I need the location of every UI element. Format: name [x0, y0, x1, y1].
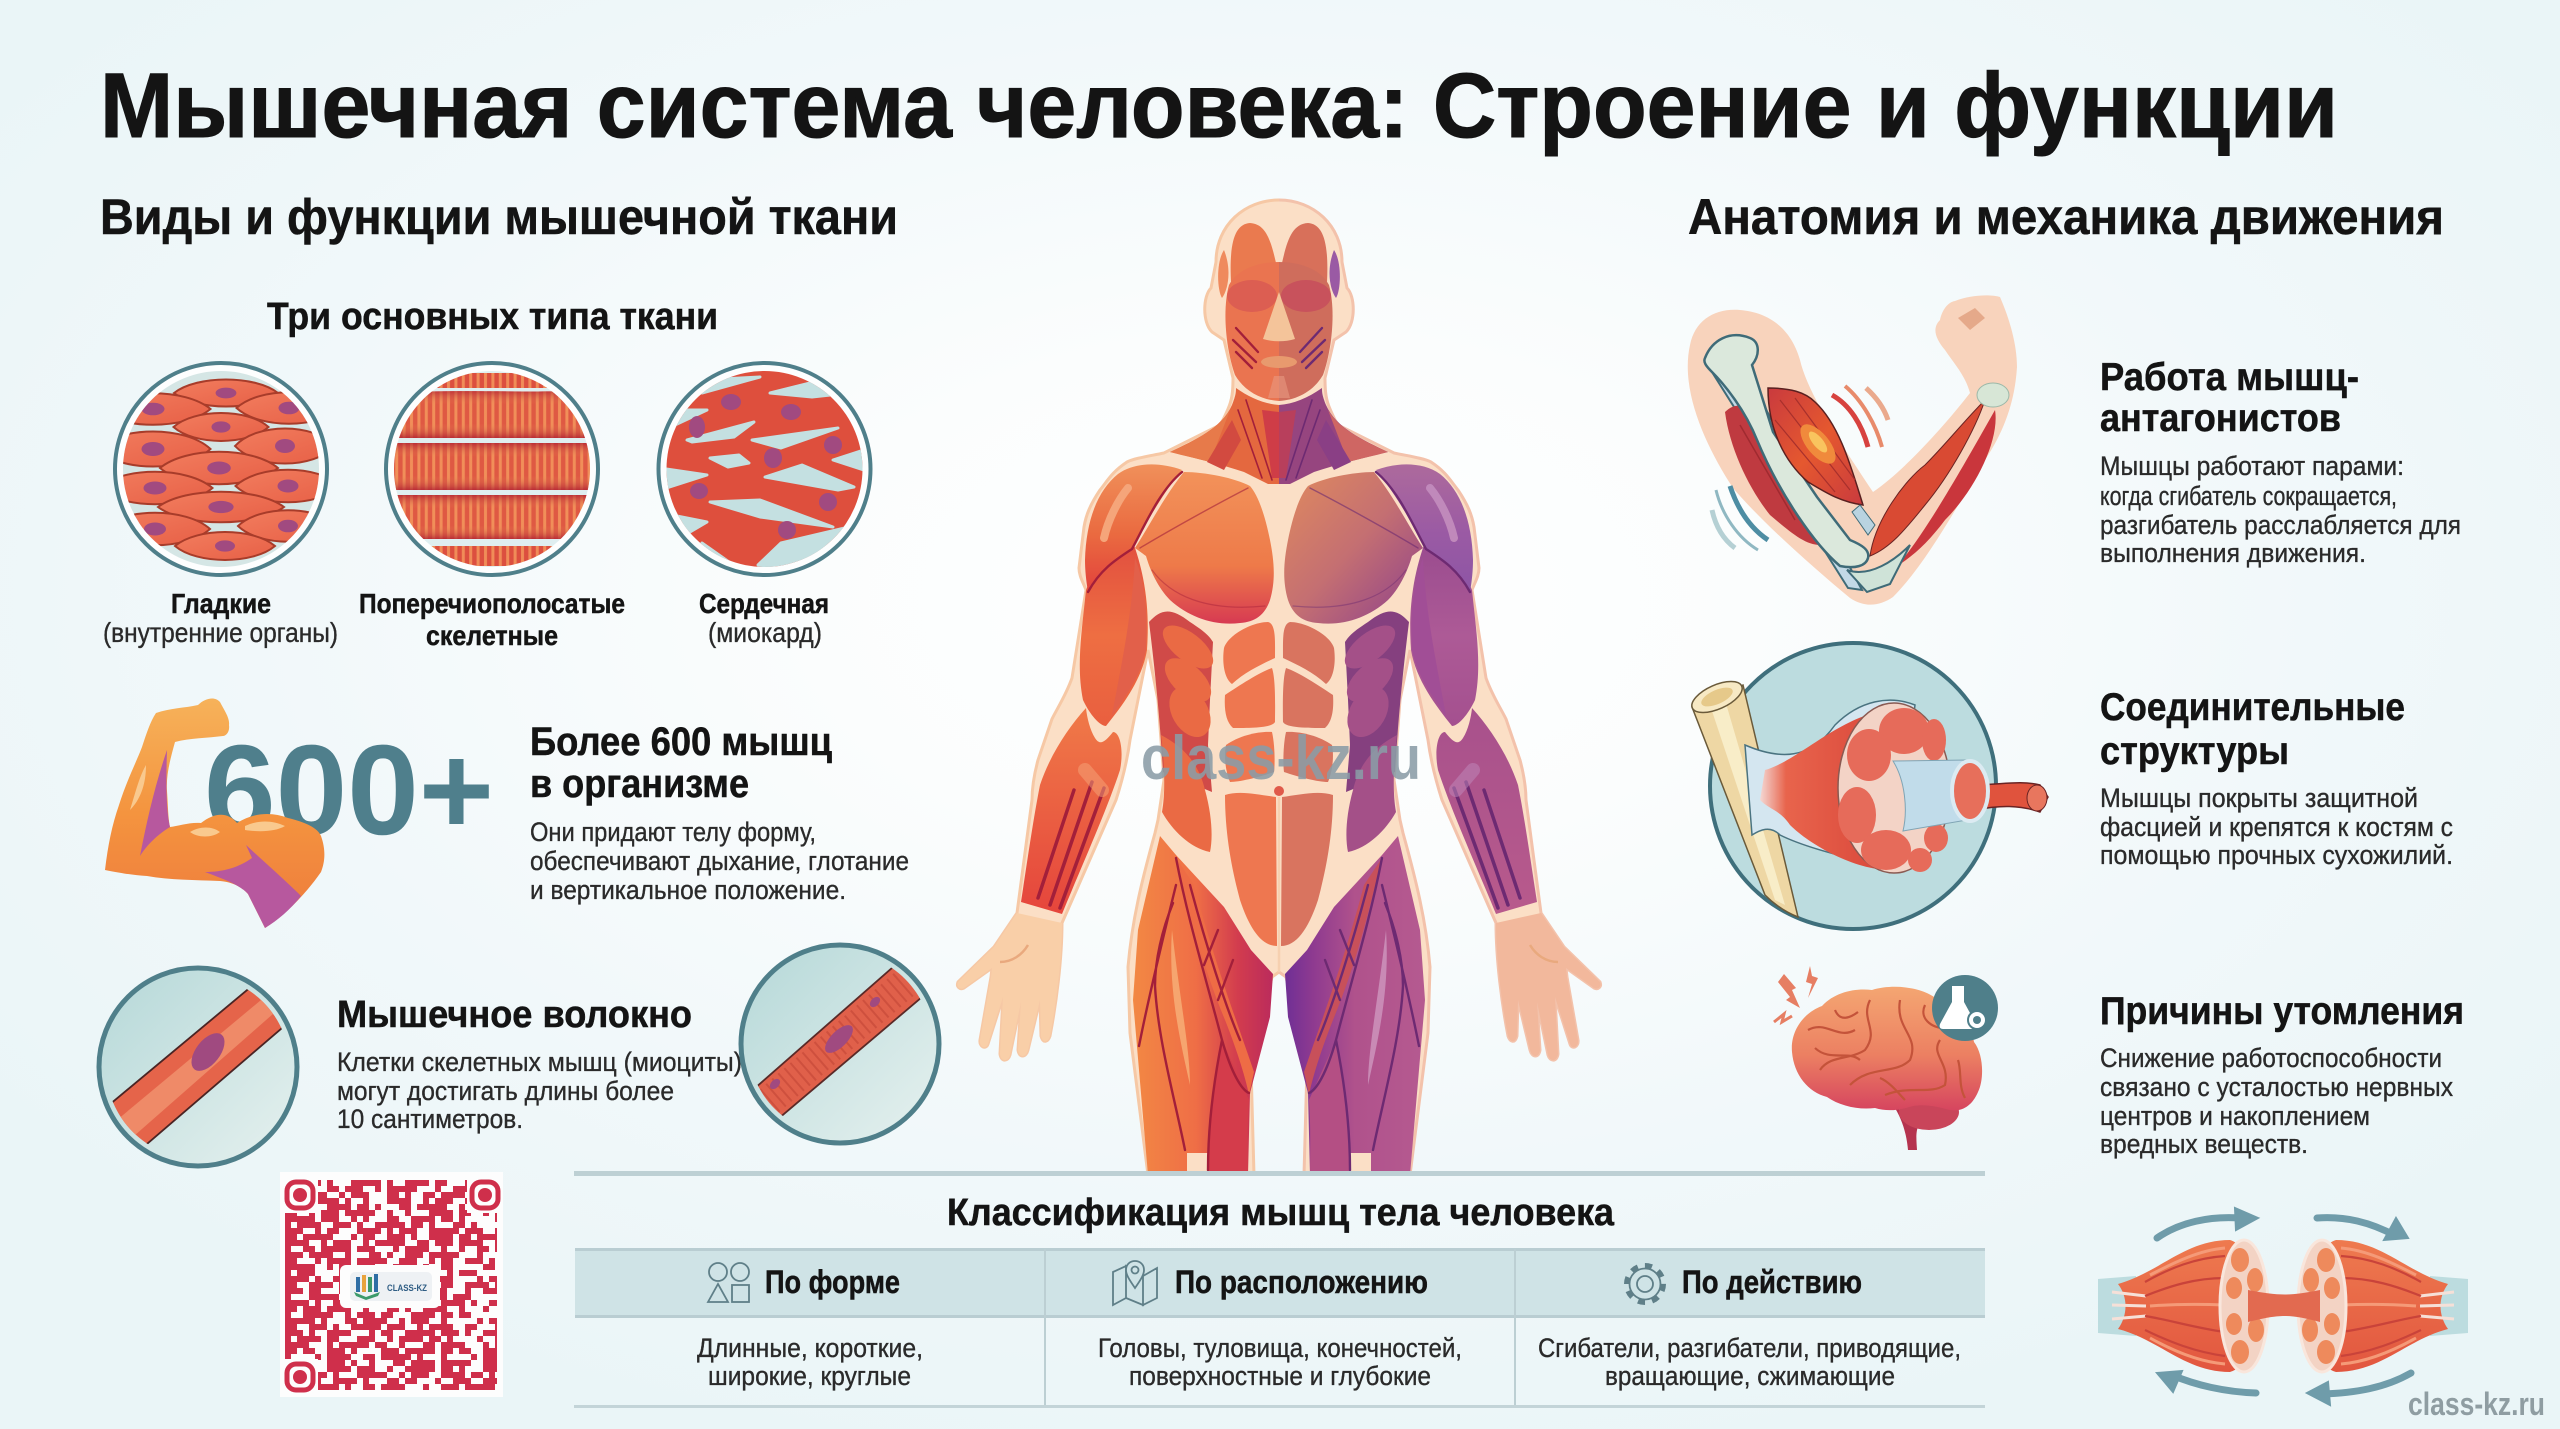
heading: connective structures: структуры — [2100, 730, 2289, 773]
QR code: CLASS-KZ — [387, 1283, 427, 1294]
big number: 600+ — [204, 719, 494, 862]
heading: more than 600: Более 600 мышц — [530, 720, 832, 764]
label: striated — [359, 588, 625, 651]
text: connective description: фасцией и крепятся к костям с — [2100, 812, 2453, 842]
label: cardiac — [699, 588, 829, 648]
figure: right half (purple muscles) — [1279, 200, 1601, 1175]
label: cardiac: (миокард) — [708, 617, 822, 648]
text: fiber description: Клетки скелетных мышц (миоциты) — [337, 1047, 742, 1077]
icon: shapes — [708, 1263, 749, 1302]
heading: more than 600: в организме — [530, 762, 749, 806]
text: muscles description — [530, 817, 909, 905]
heading: antagonists: Работа мышц- — [2100, 356, 2359, 399]
heading: causes of fatigue: Причины утомления — [2100, 990, 2464, 1033]
panel: connective structures — [1687, 643, 2453, 929]
panel: antagonist muscles — [1688, 295, 2461, 605]
icon: gear — [1627, 1266, 1663, 1302]
header: by location: По расположению — [1175, 1264, 1428, 1300]
panel: classification table — [574, 1171, 1985, 1408]
column: by location — [1098, 1261, 1462, 1391]
heading: right column: Анатомия и механика движения — [1688, 189, 2444, 245]
cell: by location: поверхностные и глубокие — [1129, 1361, 1431, 1391]
text: antagonists description: разгибатель расслабляется для — [2100, 510, 2461, 540]
cell: by location — [1098, 1333, 1462, 1391]
icon: flexed arm — [105, 698, 324, 928]
label: cardiac: Сердечная — [699, 588, 829, 619]
QR code — [280, 1172, 503, 1397]
icon: cardiac muscle circle — [655, 360, 875, 580]
icon: split muscle with arrows — [2098, 1208, 2468, 1405]
title: Мышечная система человека: Строение и функции — [100, 55, 2338, 157]
heading: left column: Виды и функции мышечной ткани — [100, 189, 898, 245]
text: fiber description: 10 сантиметров. — [337, 1104, 523, 1134]
panel: muscle fiber — [85, 945, 948, 1168]
central body figure — [957, 200, 1601, 1175]
panel: tissue types — [96, 296, 875, 651]
text: connective description — [2100, 783, 2453, 870]
icon: smooth muscle circle — [113, 361, 329, 577]
icon: fiber circle left — [85, 966, 310, 1168]
column: by action — [1538, 1264, 1961, 1391]
text: antagonists description: Мышцы работают парами: — [2100, 451, 2404, 481]
header: by action: По действию — [1682, 1264, 1862, 1300]
label: smooth: (внутренние органы) — [103, 617, 338, 648]
heading: muscle fiber: Мышечное волокно — [337, 994, 692, 1036]
cell: by action: Сгибатели, разгибатели, приводящие, — [1538, 1333, 1961, 1363]
left muscle — [2098, 1240, 2268, 1372]
icon: fiber circle right — [730, 945, 948, 1143]
table title: Классификация мышц тела человека — [947, 1192, 1615, 1234]
heading: antagonists — [2100, 356, 2359, 440]
cell: by shape — [697, 1333, 923, 1391]
text: fiber description — [337, 1047, 742, 1134]
text: muscles description: Они придают телу форму, — [530, 817, 816, 847]
icon: bent arm with muscles — [1688, 295, 2017, 605]
label: striated: Поперечиополосатые — [359, 588, 625, 619]
cell: by action: вращающие, сжимающие — [1605, 1361, 1895, 1391]
icon: striated muscle circle — [385, 360, 600, 580]
icon: brain with flask — [1774, 966, 1998, 1150]
text: muscles description: обеспечивают дыхание, глотание — [530, 846, 909, 876]
icon: muscle cross section — [1687, 643, 2048, 929]
table header band — [574, 1248, 1985, 1408]
cell: by location: Головы, туловища, конечностей, — [1098, 1333, 1462, 1363]
column: by shape — [697, 1263, 923, 1391]
watermark: centre: class-kz.ru — [1141, 724, 1421, 793]
label: smooth — [103, 588, 338, 648]
label: striated: скелетные — [426, 620, 558, 651]
label: smooth: Гладкие — [171, 588, 271, 619]
text: connective description: Мышцы покрыты защитной — [2100, 783, 2418, 813]
figure: face centre details — [1261, 292, 1297, 972]
cell: by action — [1538, 1333, 1961, 1391]
text: antagonists description — [2100, 451, 2461, 568]
text: fatigue description: связано с усталостью нервных — [2100, 1072, 2453, 1102]
heading: antagonists: антагонистов — [2100, 397, 2341, 440]
panel: causes of fatigue — [1774, 966, 2464, 1159]
cell: by shape: широкие, круглые — [708, 1361, 911, 1391]
text: fatigue description: вредных веществ. — [2100, 1129, 2308, 1159]
rotation arrows — [2157, 1208, 2411, 1405]
figure: left half (warm muscles) — [957, 200, 1279, 1175]
cell: by shape: Длинные, короткие, — [697, 1333, 923, 1363]
tendon bridge — [2248, 1290, 2320, 1322]
heading: connective structures: Соединительные — [2100, 686, 2405, 729]
text: muscles description: и вертикальное положение. — [530, 875, 846, 905]
text: fatigue description: Снижение работоспособности — [2100, 1043, 2442, 1073]
text: antagonists description: выполнения движения. — [2100, 538, 2366, 568]
heading: more than 600 — [530, 720, 832, 806]
panel: 600+ muscles — [105, 698, 909, 928]
text: antagonists description: когда сгибатель сокращается, — [2100, 481, 2397, 511]
text: fiber description: могут достигать длины более — [337, 1076, 674, 1106]
text: fatigue description — [2100, 1043, 2453, 1159]
text: fatigue description: центров и накоплением — [2100, 1101, 2370, 1131]
heading: connective structures — [2100, 686, 2405, 773]
right muscle — [2298, 1240, 2468, 1372]
text: connective description: помощью прочных сухожилий. — [2100, 840, 2453, 870]
header: by shape: По форме — [765, 1264, 900, 1300]
icon: map pin — [1113, 1261, 1157, 1305]
subheading: three tissue types: Три основных типа ткани — [267, 296, 718, 338]
